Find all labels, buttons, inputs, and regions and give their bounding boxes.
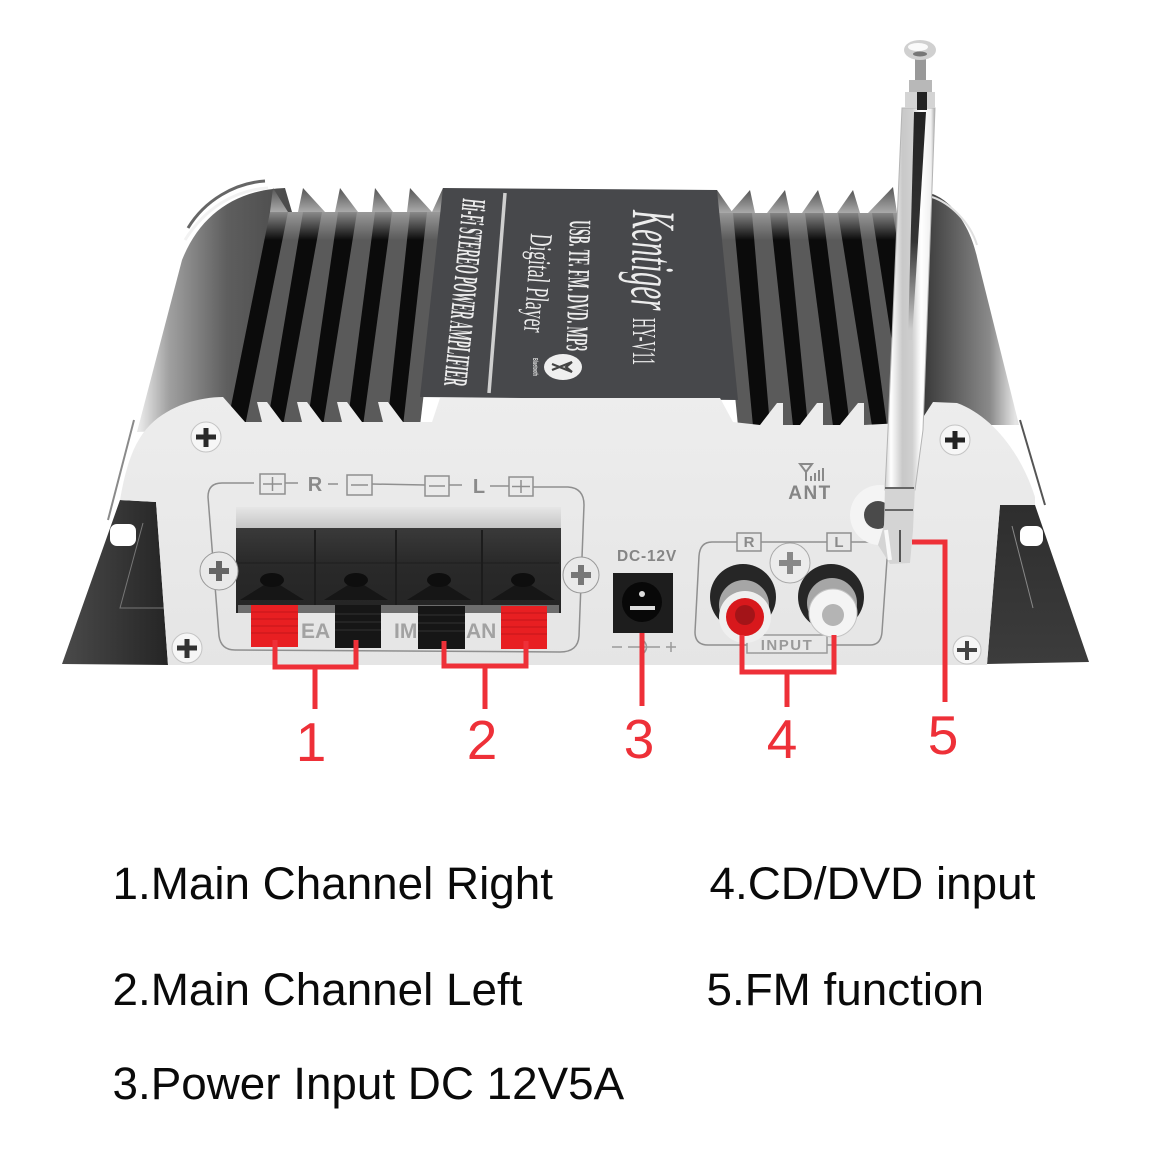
power caption: DC-12V xyxy=(617,548,677,565)
bluetooth logo xyxy=(544,354,582,380)
left mounting bracket xyxy=(62,420,168,665)
red clip: right positive xyxy=(251,605,298,647)
terminal shadow xyxy=(236,507,561,529)
legend left column xyxy=(112,858,625,1109)
antenna hinge xyxy=(878,487,915,564)
legend left column: 1.Main Channel Right xyxy=(112,858,553,909)
white RCA socket xyxy=(798,564,864,637)
top label plate xyxy=(420,188,738,400)
input R label: R xyxy=(744,534,755,551)
input caption: INPUT xyxy=(761,637,813,654)
antenna icon xyxy=(800,464,823,481)
legend right column xyxy=(706,858,1036,1015)
speaker polarity labels: L xyxy=(473,476,485,498)
top label plate: HY-V11 xyxy=(625,318,662,365)
speaker terminal block xyxy=(236,528,561,613)
callout 2 xyxy=(444,641,526,771)
antenna tip xyxy=(904,40,936,110)
panel screws xyxy=(172,422,981,664)
callout 1: 1 xyxy=(296,711,326,773)
callout 5: 5 xyxy=(928,704,958,766)
top label plate: USB. TF. FM. DVD. MP3 xyxy=(560,220,598,352)
right cooling fins xyxy=(717,187,925,426)
dc power jack xyxy=(613,573,673,633)
callout 4 xyxy=(742,635,834,770)
speaker polarity labels: R xyxy=(308,474,323,496)
input caption xyxy=(747,635,827,654)
speaker polarity labels xyxy=(260,474,533,498)
speaker impedance caption: AN xyxy=(466,620,496,643)
right heat sink cylinder xyxy=(915,192,1019,425)
speaker impedance caption xyxy=(301,620,496,643)
speaker impedance caption: EA xyxy=(301,620,330,643)
callout 1 xyxy=(275,640,356,773)
antenna socket xyxy=(850,485,910,545)
antenna caption: ANT xyxy=(788,483,832,504)
speaker impedance caption: IM xyxy=(394,620,417,643)
legend right column: 4.CD/DVD input xyxy=(710,858,1036,909)
right mounting bracket xyxy=(987,420,1089,664)
left heat sink cylinder xyxy=(137,181,292,432)
amplifier photo illustration: Hi-Fi STEREO POWER AMPLIFIER xyxy=(436,197,492,388)
callout 3 xyxy=(624,633,654,770)
legend right column: 5.FM function xyxy=(706,964,984,1015)
polarity symbol xyxy=(612,640,676,654)
input outline xyxy=(695,542,888,645)
legend left column: 2.Main Channel Left xyxy=(112,964,523,1015)
plate divider line xyxy=(489,193,505,393)
red RCA socket xyxy=(710,564,776,643)
top label plate: Kentiger xyxy=(617,209,687,311)
black clip: right negative xyxy=(335,605,381,648)
legend left column: 3.Power Input DC 12V5A xyxy=(112,1058,625,1109)
black clip: left negative xyxy=(418,606,465,649)
left cooling fins xyxy=(227,188,445,426)
red clip: left positive xyxy=(501,606,547,649)
digital player: Digital Player xyxy=(517,233,560,334)
input R label xyxy=(737,533,761,551)
callout 3: 3 xyxy=(624,708,654,770)
callout 4: 4 xyxy=(767,708,797,770)
antenna dark reflection xyxy=(908,112,926,340)
rear panel xyxy=(120,397,1035,665)
bluetooth caption: Bluetooth xyxy=(531,358,538,376)
input L label: L xyxy=(834,534,844,551)
callout 2: 2 xyxy=(467,709,497,771)
telescopic antenna xyxy=(878,40,936,564)
callout 5 xyxy=(912,542,958,766)
amplifier photo illustration xyxy=(62,40,1089,665)
speaker terminal outline xyxy=(208,483,584,652)
input L label xyxy=(827,533,851,551)
